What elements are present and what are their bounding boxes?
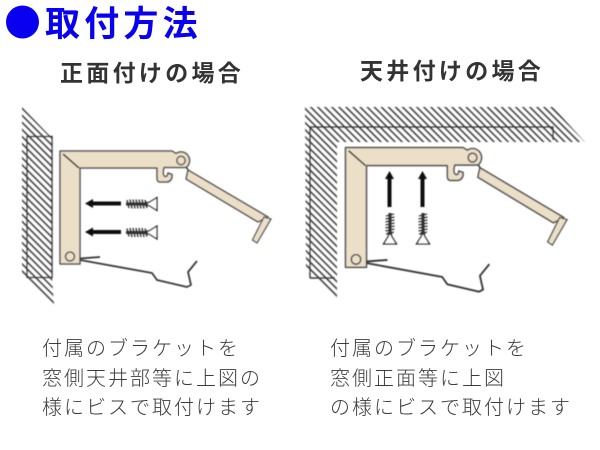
text block: ceiling mounting instructions: 窓側正面等に上図: [330, 367, 506, 390]
icon: blue bullet: [6, 6, 39, 38]
arrow: lower: [85, 228, 121, 236]
icon: right screw: [416, 213, 430, 244]
bracket and valance clip: [60, 151, 271, 287]
wall and ceiling hatch: [305, 107, 585, 301]
diagram: front mounting: [22, 107, 271, 305]
text block: front mounting instructions: 付属のブラケットを: [42, 337, 240, 360]
title: 取付方法: [6, 5, 202, 44]
arrow: right: [418, 171, 427, 207]
text block: ceiling mounting instructions: [330, 337, 572, 419]
text block: ceiling mounting instructions: の様にビスで取付けます: [330, 396, 572, 419]
text block: front mounting instructions: 様にビスで取付けます: [42, 396, 262, 419]
heading: front mounting: 正面付けの場合: [60, 60, 244, 86]
heading: ceiling mounting: 天井付けの場合: [360, 58, 544, 84]
text block: front mounting instructions: [42, 337, 262, 419]
wall hatch: [22, 107, 54, 305]
title text: 取付方法: [45, 5, 202, 44]
icon: upper screw: [126, 198, 157, 210]
icon: lower screw: [126, 226, 157, 239]
text block: ceiling mounting instructions: 付属のブラケットを: [330, 337, 528, 360]
diagram: ceiling mounting: [305, 107, 585, 301]
bracket and valance clip: [346, 148, 567, 292]
text block: front mounting instructions: 窓側天井部等に上図の: [42, 367, 262, 390]
arrow: left: [385, 171, 394, 207]
arrow: upper: [85, 199, 121, 208]
icon: left screw: [384, 213, 396, 244]
